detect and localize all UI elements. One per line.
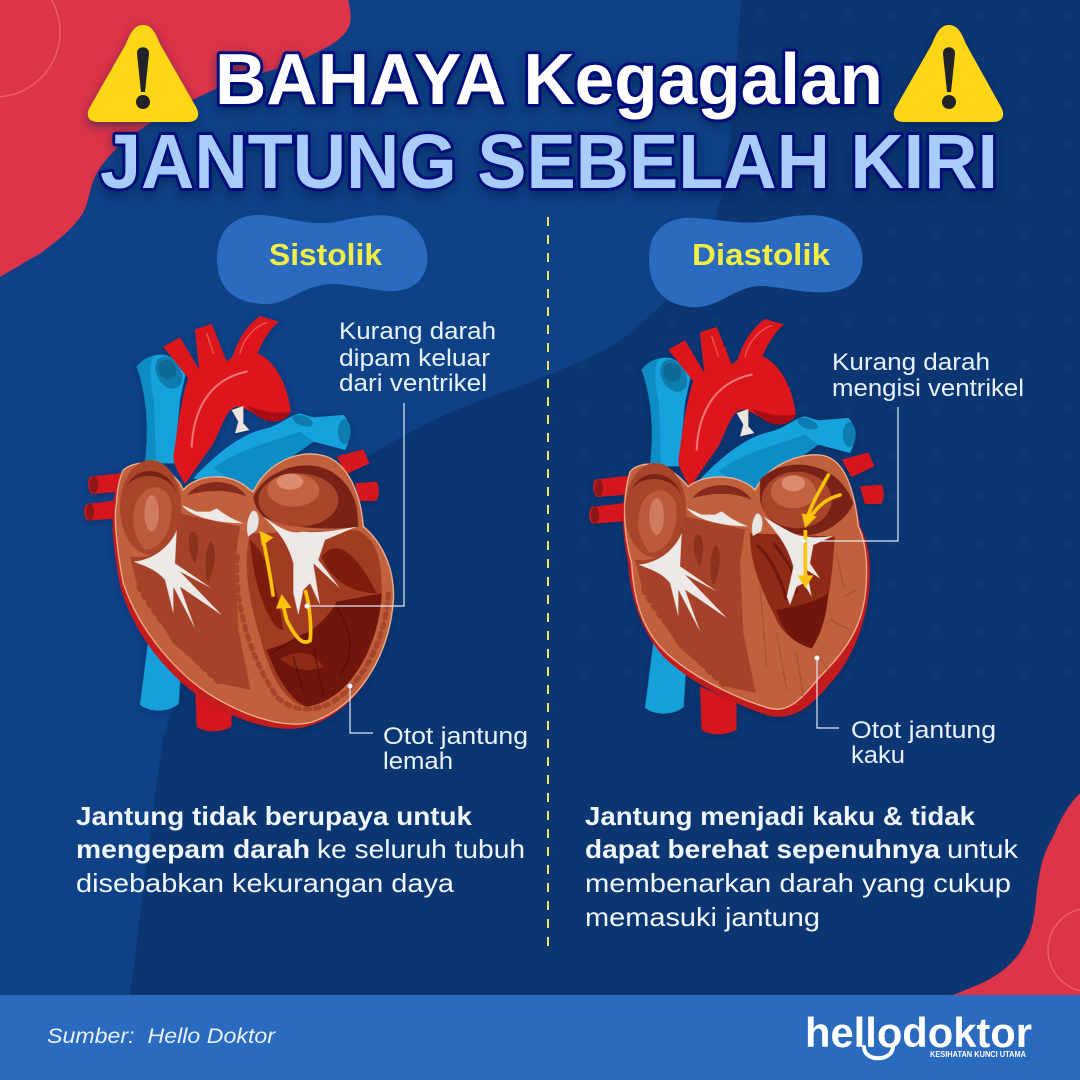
heading badge: Sistolik [217,215,427,304]
text block: sistolik description [76,801,525,898]
annotation: kurang darah dipam keluar: Kurang darah [339,318,496,345]
text block: diastolik description: Jantung menjadi kaku & tidak [585,801,976,831]
footer bar [0,995,1080,1080]
title: BAHAYA Kegagalan [215,40,883,120]
text block: sistolik description: ke seluruh tubuh [317,834,525,864]
title [100,40,998,205]
heart illustration: sistolik [84,316,393,731]
text block: sistolik description: disebabkan kekurangan daya [76,868,455,898]
annotation: kurang darah mengisi ventrikel: Kurang darah [832,349,990,376]
text block: sistolik description: mengepam darah [76,834,310,864]
source credit: Sumber: Hello Doktor [47,1025,276,1048]
annotation: otot jantung kaku: kaku [851,742,905,769]
text block: diastolik description [585,801,1019,932]
annotation: otot jantung lemah [383,723,528,775]
text block: diastolik description: dapat berehat sepenuhnya [585,834,941,864]
text block: diastolik description: untuk [947,834,1019,864]
leader lines: diastolik [801,407,898,728]
annotation: otot jantung lemah: Otot jantung [383,723,528,750]
annotation: kurang darah dipam keluar [339,318,496,397]
leader lines: sistolik [305,403,404,733]
logo: hello doktor: hellodoktor [805,1009,1032,1056]
warning icon: left [88,25,198,122]
red blob: top left [0,0,351,277]
annotation: kurang darah dipam keluar: dari ventrikel [339,370,487,397]
heading badge: Diastolik [649,215,863,307]
warning icon: right [894,25,1003,122]
logo: hello doktor: KESIHATAN KUNCI UTAMA [930,1050,1026,1059]
annotation: otot jantung lemah: lemah [383,748,453,775]
red blob: bottom right [953,793,1080,995]
text block: sistolik description: Jantung tidak berupaya untuk [76,801,473,831]
annotation: otot jantung kaku: Otot jantung [851,717,996,744]
annotation: kurang darah mengisi ventrikel [832,349,1024,402]
heading badge: Diastolik: Diastolik [692,237,831,272]
title: JANTUNG SEBELAH KIRI [100,119,998,205]
heart illustration: diastolik [589,319,884,734]
annotation: kurang darah dipam keluar: dipam keluar [339,345,490,372]
annotation: kurang darah mengisi ventrikel: mengisi ventrikel [832,375,1024,402]
heading badge: Sistolik: Sistolik [269,237,383,272]
annotation: otot jantung kaku [851,717,996,769]
divider [547,217,549,952]
text block: diastolik description: membenarkan darah yang cukup [585,868,1011,898]
text block: diastolik description: memasuki jantung [585,902,820,932]
